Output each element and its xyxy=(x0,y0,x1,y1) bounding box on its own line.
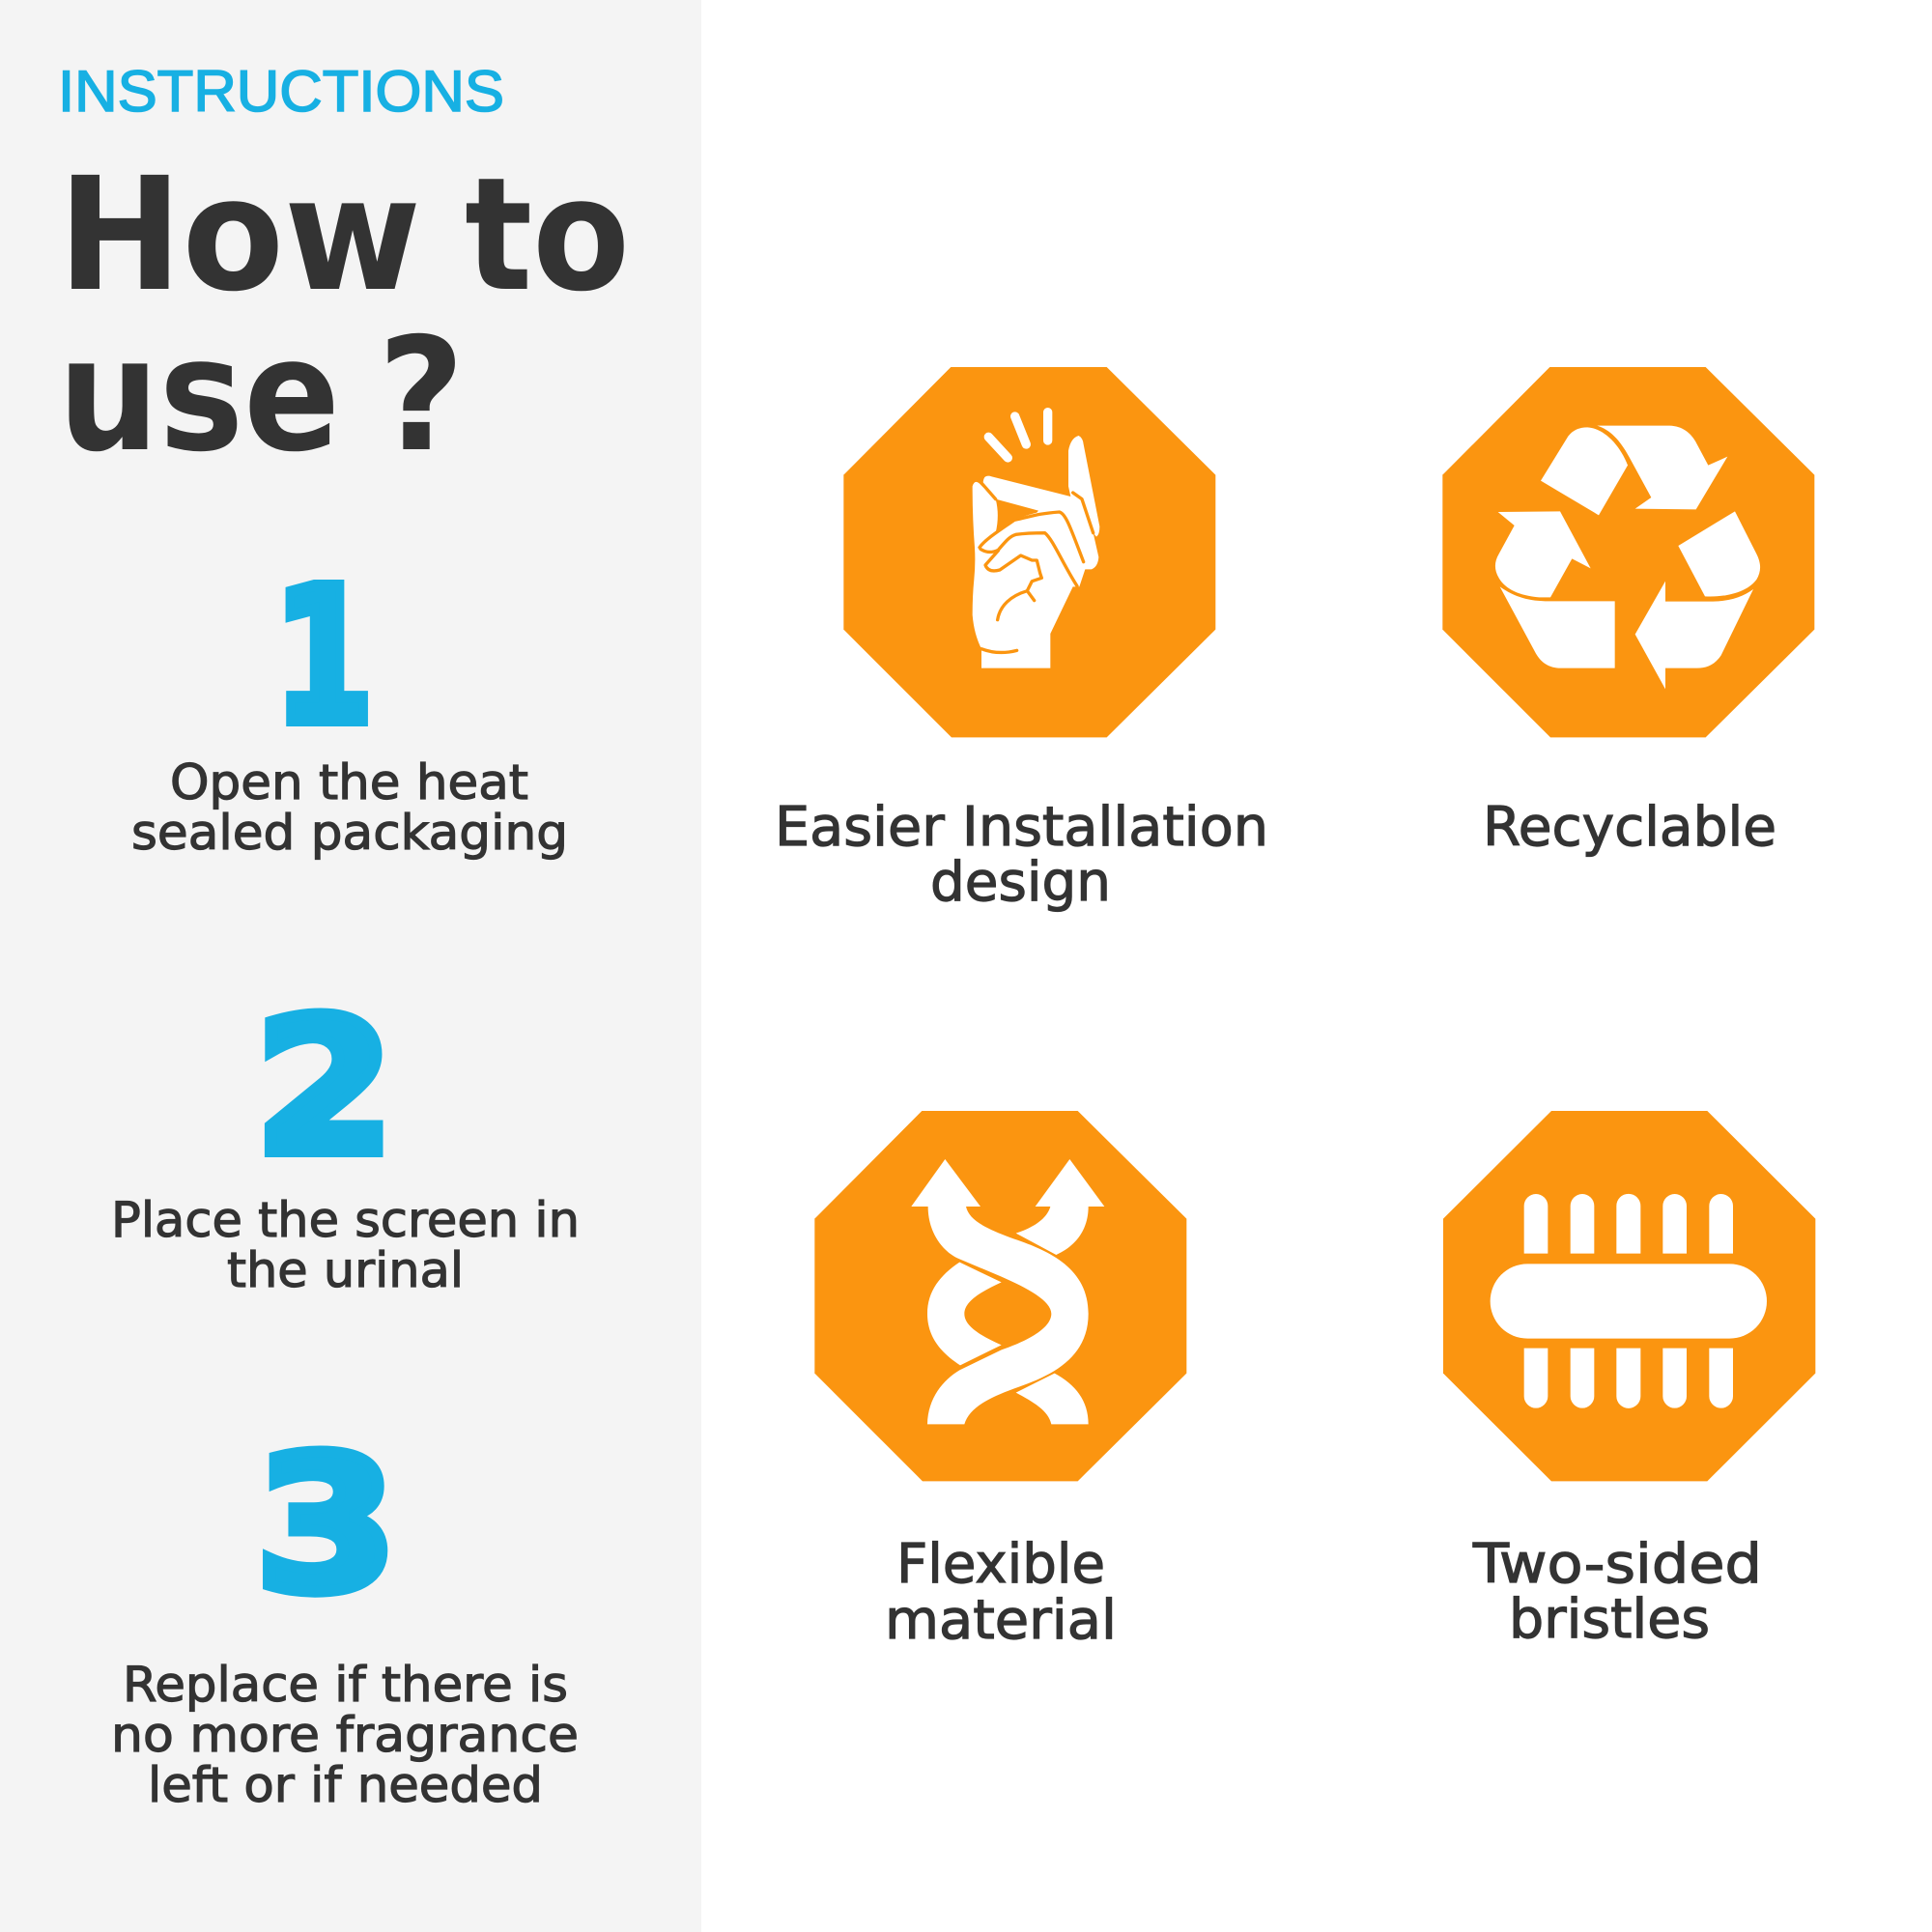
icon: two-sided bristles octagon xyxy=(1443,1111,1815,1481)
step 1 number: 1 xyxy=(274,550,373,765)
step 2 text xyxy=(111,1192,580,1298)
step 3 text: left or if needed xyxy=(148,1757,543,1813)
step 3 text: Replace if there is xyxy=(123,1657,568,1713)
step 2 text: the urinal xyxy=(227,1242,464,1298)
eyebrow heading: INSTRUCTIONS: INSTRUCTIONS xyxy=(58,59,504,124)
label: Flexible material: Flexible xyxy=(896,1533,1105,1596)
label: Easier Installation design: design xyxy=(930,851,1111,914)
step 2 text: Place the screen in xyxy=(111,1192,580,1248)
title: How to use ? xyxy=(58,145,630,487)
icon: hand snapping octagon xyxy=(843,367,1215,737)
label: Flexible material: material xyxy=(885,1589,1117,1652)
step 1 text xyxy=(131,754,568,861)
icon: flexible twist octagon xyxy=(814,1111,1186,1481)
step 3 number: 3 xyxy=(255,1418,398,1634)
title: How to use ?: How xyxy=(58,145,421,327)
title: How to use ?: ? xyxy=(378,305,465,487)
panel: instructions xyxy=(0,0,701,1932)
title: How to use ?: use xyxy=(58,305,340,487)
label: Easier Installation design: Easier Installation xyxy=(775,796,1268,859)
label: Flexible material xyxy=(885,1533,1117,1652)
label: Two-sided bristles: bristles xyxy=(1509,1588,1710,1651)
step 3 text: no more fragrance xyxy=(111,1707,579,1763)
step 1 text: sealed packaging xyxy=(131,805,568,861)
label: Recyclable: Recyclable xyxy=(1483,796,1776,859)
label: Two-sided bristles: Two-sided xyxy=(1472,1533,1762,1596)
label: Two-sided bristles xyxy=(1472,1533,1762,1651)
label: Easier Installation design xyxy=(775,796,1268,914)
step 1 text: Open the heat xyxy=(170,754,528,810)
step 3 text xyxy=(111,1657,579,1813)
icon: recycle octagon xyxy=(1442,367,1814,737)
title: How to use ?: to xyxy=(465,145,630,327)
step 2 number: 2 xyxy=(255,980,394,1196)
